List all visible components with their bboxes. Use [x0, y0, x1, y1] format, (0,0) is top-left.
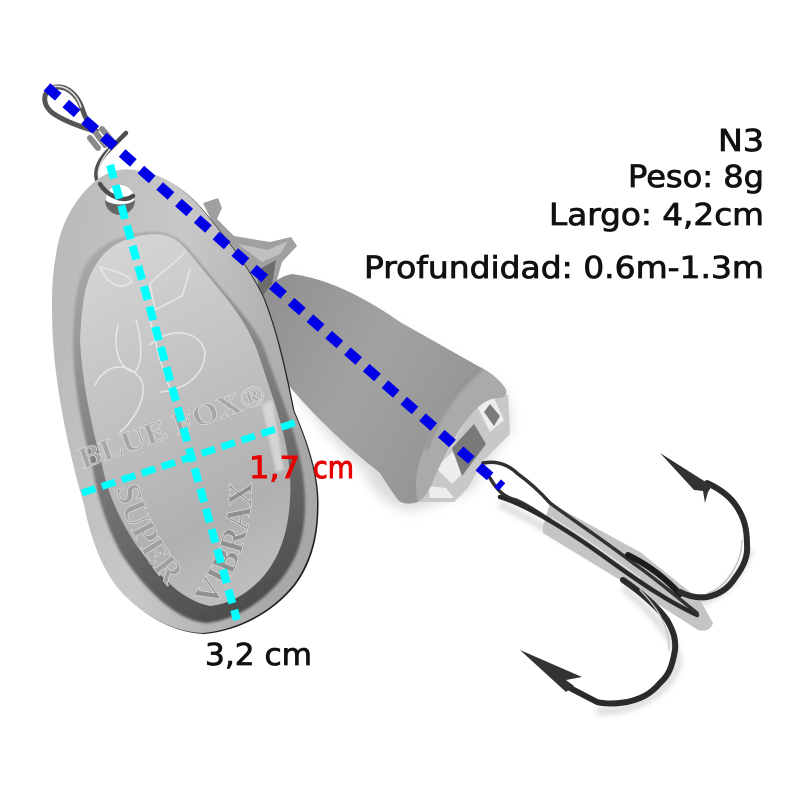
engraved brand: SUPER: SUPER [116, 484, 180, 586]
embossed fox outline [95, 252, 205, 432]
spec: model: N3 [718, 124, 764, 159]
blade width dashed line (cyan) [82, 421, 300, 493]
shank wires [500, 497, 697, 615]
icon: wire through blade hole [100, 184, 133, 199]
blade hole [106, 185, 134, 213]
engraved brand: VIBRAX: VIBRAX [193, 482, 252, 599]
upper barb hook [680, 483, 747, 597]
hook shadow [502, 505, 749, 711]
icon: gear collar [420, 395, 510, 502]
label: blade width 1,7 cm: 1,7 [249, 451, 300, 486]
icon: spinner blade [52, 169, 319, 634]
blade length dashed line (cyan) [110, 165, 237, 620]
icon: hook shank sleeve [543, 503, 713, 631]
icon: swivel and wire eye [45, 86, 133, 199]
spec: length: Largo: 4,2cm [549, 198, 764, 233]
hook eye loop [483, 462, 550, 503]
icon: treble hook [483, 453, 749, 711]
length dashed line (blue) [47, 87, 502, 487]
lower hook point and barb [520, 650, 582, 692]
label: blade length 3,2 cm: 3,2 cm [205, 638, 312, 673]
engraved brand: BLUE FOX: BLUE FOX® [74, 378, 270, 476]
icon: rear fin of spinner body [203, 198, 297, 298]
lower barb hook [570, 580, 675, 704]
blade inner panel [80, 234, 290, 606]
upper hook point and barb [660, 453, 712, 503]
spec: depth: Profundidad: 0.6m-1.3m [364, 251, 764, 286]
icon: spinner body (grey bullet) [262, 274, 512, 510]
specifications text block [364, 124, 764, 286]
blade inner dark rim [73, 232, 305, 623]
spec: weight: Peso: 8g [628, 160, 764, 195]
blade highlight [262, 400, 284, 472]
label: blade width 1,7 cm: cm [313, 451, 354, 486]
